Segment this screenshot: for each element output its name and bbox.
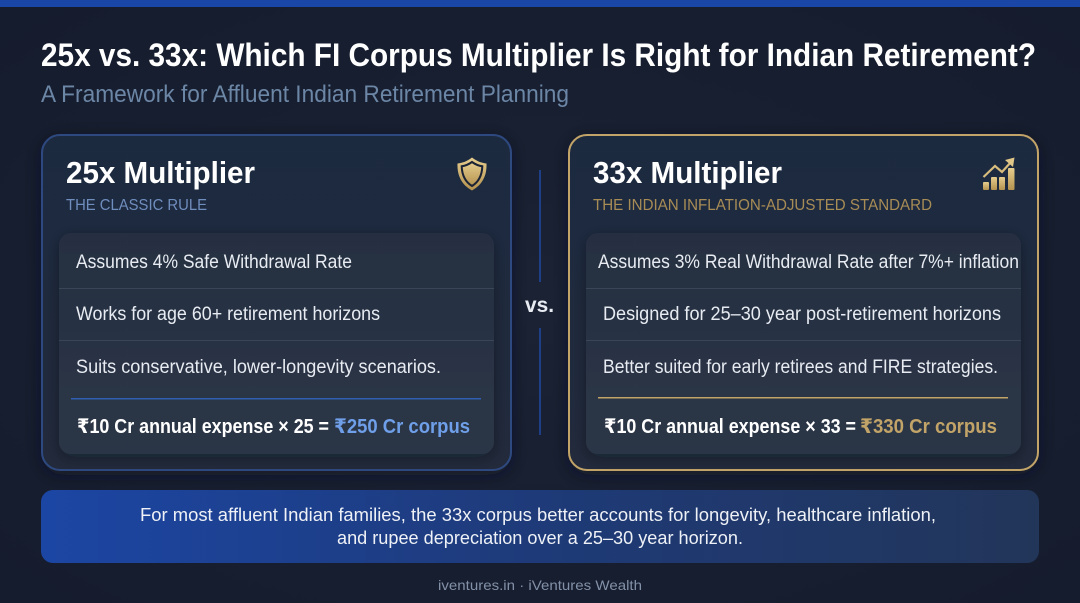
- label: the classic rule: THE CLASSIC RULE: [66, 197, 207, 214]
- row: scenarios: Suits conservative, lower-longevity scenarios.: [76, 357, 441, 378]
- vs label: vs.: [525, 294, 554, 317]
- footer: iventures.in · iVentures Wealth: [438, 577, 642, 593]
- inner panel: assumptions: [59, 233, 494, 454]
- divider: lower vs line: [539, 328, 541, 435]
- formula: 33x corpus: ₹10 Cr annual expense × 33 =: [604, 416, 856, 438]
- row: withdrawal rate: Assumes 4% Safe Withdrawal Rate: [76, 252, 352, 273]
- heading: 33x multiplier: 33x Multiplier: [593, 155, 782, 190]
- panel: 33x multiplier: [569, 135, 1038, 470]
- divider: upper vs line: [539, 170, 541, 282]
- heading: 25x multiplier: 25x Multiplier: [66, 155, 255, 190]
- icon: shield: [457, 158, 487, 190]
- icon: growth chart: [983, 158, 1014, 190]
- inner panel: assumptions: [586, 233, 1021, 454]
- top accent bar: [0, 0, 1080, 7]
- conclusion text: and rupee depreciation over a 25–30 year horizon.: [337, 528, 743, 548]
- row: retirement horizon: Works for age 60+ retirement horizons: [76, 304, 380, 325]
- panel: 25x multiplier: [42, 135, 511, 470]
- conclusion text: [140, 505, 936, 548]
- row: withdrawal rate: Assumes 3% Real Withdrawal Rate after 7%+ inflation: [598, 252, 1019, 273]
- conclusion banner: [41, 490, 1039, 563]
- formula: 25x corpus: ₹10 Cr annual expense × 25 =: [77, 416, 329, 438]
- title: 25x vs. 33x: Which FI Corpus Multiplier Is Right for Indian Retirement?: [41, 37, 1036, 73]
- formula: 33x corpus: ₹330 Cr corpus: [860, 416, 997, 438]
- conclusion text: For most affluent Indian families, the 33x corpus better accounts for longevity, healthcare inflation,: [140, 505, 936, 525]
- row: early retirees: Better suited for early retirees and FIRE strategies.: [603, 357, 998, 378]
- row: retirement horizon: Designed for 25–30 year post-retirement horizons: [603, 304, 1001, 325]
- formula: 25x corpus: ₹250 Cr corpus: [334, 416, 470, 438]
- subtitle: A Framework for Affluent Indian Retirement Planning: [41, 81, 569, 108]
- label: inflation-adjusted standard: THE INDIAN INFLATION-ADJUSTED STANDARD: [593, 197, 932, 214]
